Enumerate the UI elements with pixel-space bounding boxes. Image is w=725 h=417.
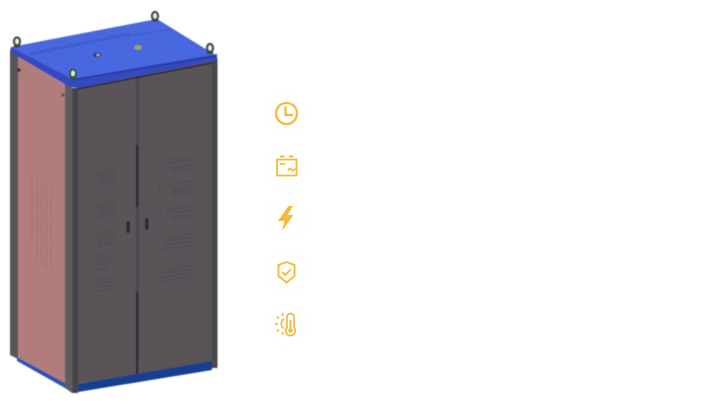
- roof ports: [93, 53, 101, 57]
- right door vents: [160, 157, 193, 281]
- side panel: [17, 56, 65, 383]
- bottom rails: [17, 357, 65, 388]
- roof perforation line: [30, 34, 130, 54]
- icon: sun and thermometer: [275, 313, 295, 336]
- double doors: [78, 58, 212, 384]
- side panel vents: [32, 176, 51, 272]
- cabinet illustration: [10, 12, 218, 393]
- icon: shield with check: [278, 262, 294, 282]
- icon: lightning bolt: [278, 206, 294, 231]
- center corner post: [65, 84, 78, 393]
- left corner post: [10, 50, 18, 359]
- door handles: [126, 221, 130, 233]
- icon halos: [266, 94, 306, 344]
- roof: [11, 19, 217, 85]
- roof front edge: [10, 47, 217, 88]
- icon: battery: [277, 156, 296, 176]
- door seam: [136, 76, 139, 363]
- left door vents: [98, 169, 116, 291]
- side panel bolts: [17, 68, 21, 72]
- right corner post: [212, 58, 218, 368]
- icon: clock: [276, 103, 297, 124]
- lifting eyes: [14, 12, 213, 80]
